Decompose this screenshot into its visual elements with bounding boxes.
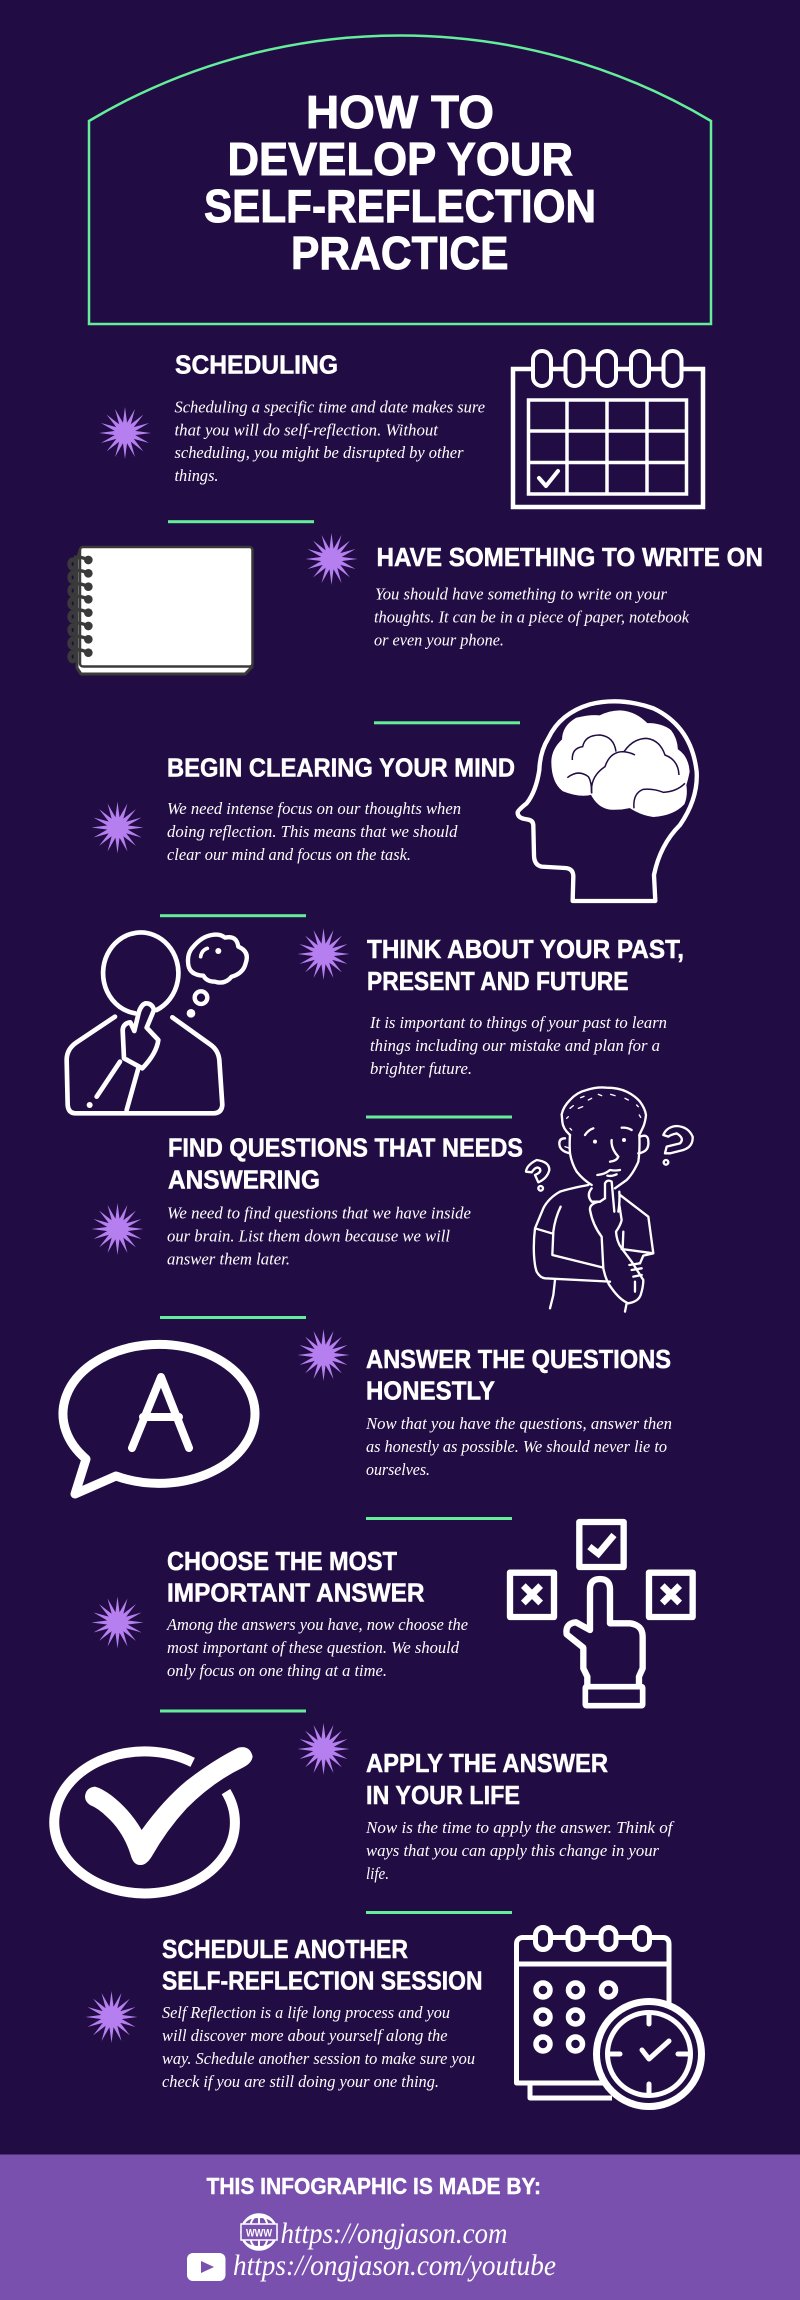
- text: answer honestly: as honestly as possible. We should never lie to: [366, 1437, 667, 1456]
- heading: choose important: CHOOSE THE MOST: [167, 1546, 397, 1576]
- arch frame: [89, 35, 711, 324]
- text: schedule another: Self Reflection is a life long process and you: [162, 2003, 450, 2022]
- text: scheduling: things.: [174, 466, 218, 485]
- text: apply answer: Now is the time to apply the answer. Think of: [365, 1818, 675, 1837]
- icon: thinking man with question marks: [526, 1087, 693, 1312]
- section: past present future: [67, 928, 684, 1113]
- title: PRACTICE: [291, 227, 508, 279]
- title panel: [89, 35, 711, 324]
- section: find questions: [92, 1087, 693, 1312]
- text: clearing mind: We need intense focus on our thoughts when: [167, 799, 461, 818]
- text: past present future: things including our mistake and plan for a: [370, 1036, 660, 1055]
- icon: star: [86, 1991, 138, 2043]
- heading: choose important: IMPORTANT ANSWER: [167, 1578, 425, 1608]
- title: HOW TO: [306, 86, 494, 138]
- heading: apply answer: IN YOUR LIFE: [366, 1780, 520, 1810]
- heading: apply answer: [366, 1748, 608, 1810]
- section: apply the answer: [54, 1723, 675, 1893]
- heading: find questions: FIND QUESTIONS THAT NEEDS: [168, 1132, 523, 1162]
- icon: star: [298, 928, 350, 980]
- text: find questions: [167, 1204, 471, 1268]
- text: choose important: Among the answers you have, now choose the: [166, 1615, 468, 1634]
- text: past present future: It is important to things of your past to learn: [369, 1013, 667, 1032]
- heading: answer honestly: HONESTLY: [366, 1376, 495, 1406]
- title: DEVELOP YOUR: [228, 133, 573, 185]
- link: youtube: https://ongjason.com/youtube: [233, 2249, 556, 2282]
- icon: head with brain: [518, 701, 697, 901]
- heading: scheduling: SCHEDULING: [175, 350, 338, 380]
- text: answer honestly: [365, 1414, 672, 1479]
- heading: schedule another: SELF-REFLECTION SESSION: [162, 1966, 482, 1996]
- heading: find questions: ANSWERING: [168, 1164, 320, 1194]
- heading: past present future: [367, 934, 684, 996]
- text: find questions: We need to find questions that we have inside: [167, 1204, 471, 1222]
- icon: tick in circle: [54, 1747, 253, 1893]
- text: apply answer: [365, 1818, 675, 1883]
- text: schedule another: way. Schedule another session to make sure you: [162, 2049, 475, 2068]
- text: clearing mind: clear our mind and focus on the task.: [167, 845, 411, 864]
- title: SELF-REFLECTION: [204, 180, 596, 232]
- text: answer honestly: ourselves.: [366, 1460, 430, 1479]
- text: scheduling: that you will do self-reflection. Without: [174, 420, 439, 440]
- icon: notebook: [67, 547, 252, 674]
- icon: star: [99, 407, 151, 459]
- section: scheduling: [99, 350, 703, 507]
- heading: apply answer: APPLY THE ANSWER: [366, 1748, 608, 1778]
- text: schedule another: [162, 2003, 475, 2091]
- heading: write on: HAVE SOMETHING TO WRITE ON: [376, 542, 763, 572]
- icon: thinking person: [67, 932, 247, 1113]
- text: choose important: most important of these question. We should: [167, 1638, 459, 1657]
- text: scheduling: scheduling, you might be disrupted by other: [174, 443, 464, 462]
- title: [204, 86, 596, 279]
- icon: star: [92, 1203, 144, 1255]
- text: write on: thoughts. It can be in a piece of paper, notebook: [374, 608, 689, 626]
- text: choose important: [166, 1615, 468, 1680]
- text: write on: [374, 584, 689, 650]
- heading: past present future: THINK ABOUT YOUR PAST,: [367, 934, 684, 964]
- section: choose most important: [92, 1522, 693, 1706]
- icon: star: [306, 533, 358, 585]
- section: begin clearing your mind: [92, 701, 697, 901]
- footer panel: [0, 2154, 800, 2300]
- icon: youtube: [187, 2253, 226, 2281]
- section: schedule another session: [86, 1928, 702, 2106]
- footer heading: THIS INFOGRAPHIC IS MADE BY:: [206, 2173, 541, 2199]
- heading: schedule another: [162, 1934, 482, 1996]
- heading: past present future: PRESENT AND FUTURE: [367, 966, 628, 996]
- heading: clearing mind: BEGIN CLEARING YOUR MIND: [167, 752, 515, 782]
- icon: pointing hand choosing boxes: [510, 1522, 693, 1706]
- text: answer honestly: Now that you have the questions, answer then: [365, 1414, 672, 1433]
- text: find questions: our brain. List them down because we will: [167, 1226, 450, 1246]
- icon: globe: [241, 2214, 277, 2250]
- heading: answer honestly: ANSWER THE QUESTIONS: [366, 1344, 671, 1374]
- heading: schedule another: SCHEDULE ANOTHER: [162, 1934, 408, 1964]
- text: schedule another: check if you are still doing your one thing.: [162, 2072, 439, 2091]
- heading: find questions: [168, 1132, 523, 1194]
- text: past present future: [369, 1013, 667, 1078]
- icon: speech bubble with A: [63, 1344, 255, 1494]
- text: clearing mind: doing reflection. This means that we should: [167, 822, 458, 841]
- text: scheduling: [174, 398, 485, 485]
- text: find questions: answer them later.: [167, 1250, 290, 1268]
- icon: globe: WWW: [246, 2228, 273, 2240]
- text: scheduling: Scheduling a specific time and date makes sure: [174, 398, 485, 416]
- icon: star: [298, 1329, 350, 1381]
- link: website: https://ongjason.com: [280, 2217, 508, 2250]
- icon: star: [92, 802, 144, 854]
- icon: star: [92, 1596, 144, 1648]
- heading: answer honestly: [366, 1344, 671, 1406]
- text: apply answer: life.: [366, 1864, 389, 1883]
- text: choose important: only focus on one thing at a time.: [167, 1661, 387, 1680]
- section: answer honestly: [63, 1329, 672, 1494]
- text: clearing mind: [167, 799, 461, 864]
- text: apply answer: ways that you can apply this change in your: [366, 1841, 659, 1860]
- text: write on: You should have something to write on your: [375, 584, 667, 604]
- text: past present future: brighter future.: [370, 1059, 472, 1078]
- icon: calendar: [513, 351, 703, 507]
- icon: star: [298, 1723, 350, 1775]
- icon: calendar with clock: [516, 1928, 702, 2106]
- text: schedule another: will discover more about yourself along the: [162, 2026, 448, 2045]
- heading: choose important: [167, 1546, 425, 1608]
- section: have something to write on: [67, 533, 763, 674]
- text: write on: or even your phone.: [374, 630, 504, 650]
